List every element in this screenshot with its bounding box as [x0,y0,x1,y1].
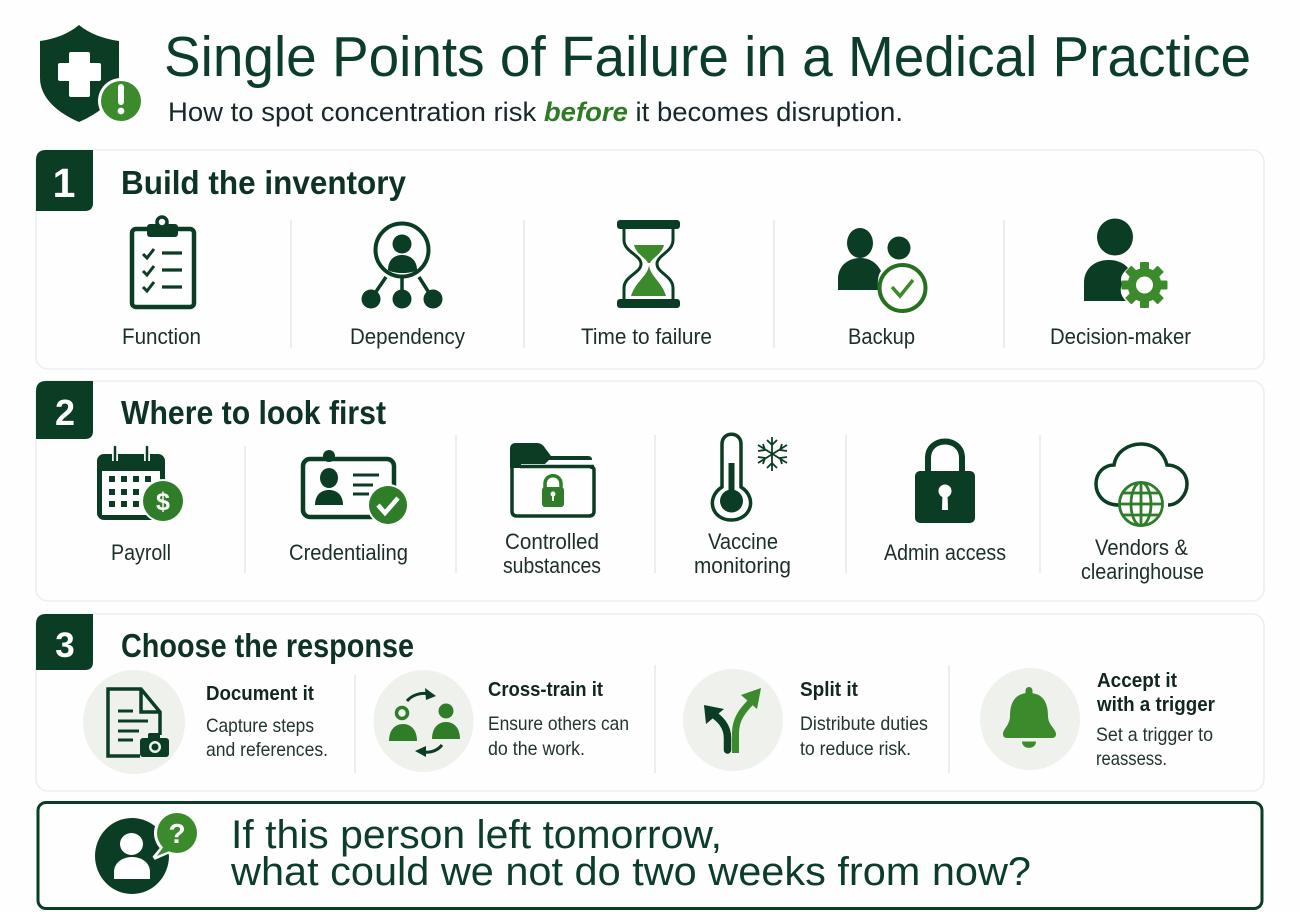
icon: calendar with dollar badge [97,447,185,523]
text: document it: and references. [206,739,328,761]
text: split it: to reduce risk. [800,738,911,760]
text: document it: Capture steps [206,715,314,737]
heading: where to look first: Where to look first [121,394,386,431]
heading: choose the response: Choose the response [121,627,414,664]
label: controlled substances: Controlled [505,529,599,554]
step number badge 2: 2 [55,392,75,433]
icon: thermometer with snowflake [712,434,787,520]
text: cross-train it: Ensure others can [488,713,629,735]
icon: document with camera [83,670,185,774]
icon: person with question bubble: ? [168,818,186,849]
icon: hourglass [617,220,680,308]
title: Single Points of Failure in a Medical Practice [164,25,1251,89]
icon: bell [980,668,1080,770]
label: controlled substances: substances [503,553,601,578]
label: dependency: Dependency [350,324,466,349]
icon: dependency person with nodes [362,224,442,308]
callout: key question [38,802,1262,908]
text: document it [206,682,328,761]
label: controlled substances [503,529,601,578]
text: accept it with a trigger [1096,669,1215,770]
icon: split arrows [683,669,783,771]
icon: shield with medical cross and alert badge [40,25,144,124]
icon: person with gear [1084,218,1168,308]
text: accept it with a trigger: reassess. [1096,748,1167,770]
text: document it: Document it [206,682,314,705]
subtitle: How to spot concentration risk before it becomes disruption. [168,97,903,127]
icon: person with question bubble [95,810,200,894]
icon: clipboard checklist [132,217,194,307]
text: accept it with a trigger: Accept it [1097,669,1177,692]
label: vaccine monitoring: Vaccine [708,529,778,554]
step number badge 2 [36,381,93,439]
label: function: Function [122,324,201,349]
label: vendors and clearinghouse: Vendors & [1095,535,1188,560]
icon: cloud with globe [1096,444,1187,526]
text: cross-train it: do the work. [488,738,585,760]
icon: id card with check badge [303,450,409,526]
label: decision-maker: Decision-maker [1050,324,1191,349]
icon: folder with lock [510,443,594,516]
callout question text: what could we not do two weeks from now? [230,850,1031,894]
label: vaccine monitoring [694,529,791,578]
step number badge 1 [36,150,93,211]
callout question text [230,813,1031,894]
icon: two people with check backup [838,228,926,311]
text: split it: Split it [800,678,858,701]
step number badge 3: 3 [55,626,75,665]
label: vendors and clearinghouse [1081,535,1204,584]
label: time to failure: Time to failure [581,324,712,349]
text: split it [800,678,928,760]
icon: calendar with dollar badge: $ [156,488,170,516]
icon: padlock [915,442,975,523]
callout question text: If this person left tomorrow, [231,813,722,857]
text: cross-train it: Cross-train it [488,678,603,701]
panel: step 3 choose the response [36,614,1264,791]
step number badge 3 [36,614,93,670]
panel: step 1 build the inventory [36,150,1264,369]
label: backup: Backup [848,324,915,349]
label: vendors and clearinghouse: clearinghouse [1081,559,1204,584]
step number badge 1: 1 [53,160,75,206]
label: payroll: Payroll [111,540,171,565]
label: admin access: Admin access [884,540,1006,565]
panel: step 2 where to look first [36,381,1264,601]
text: split it: Distribute duties [800,713,928,735]
text: cross-train it [488,678,629,760]
heading: build the inventory: Build the inventory [121,164,407,201]
icon: cross-train people with arrows [374,670,474,772]
label: vaccine monitoring: monitoring [694,553,791,578]
label: credentialing: Credentialing [289,540,408,565]
text: accept it with a trigger: with a trigger [1096,693,1215,716]
text: accept it with a trigger: Set a trigger to [1096,724,1213,746]
